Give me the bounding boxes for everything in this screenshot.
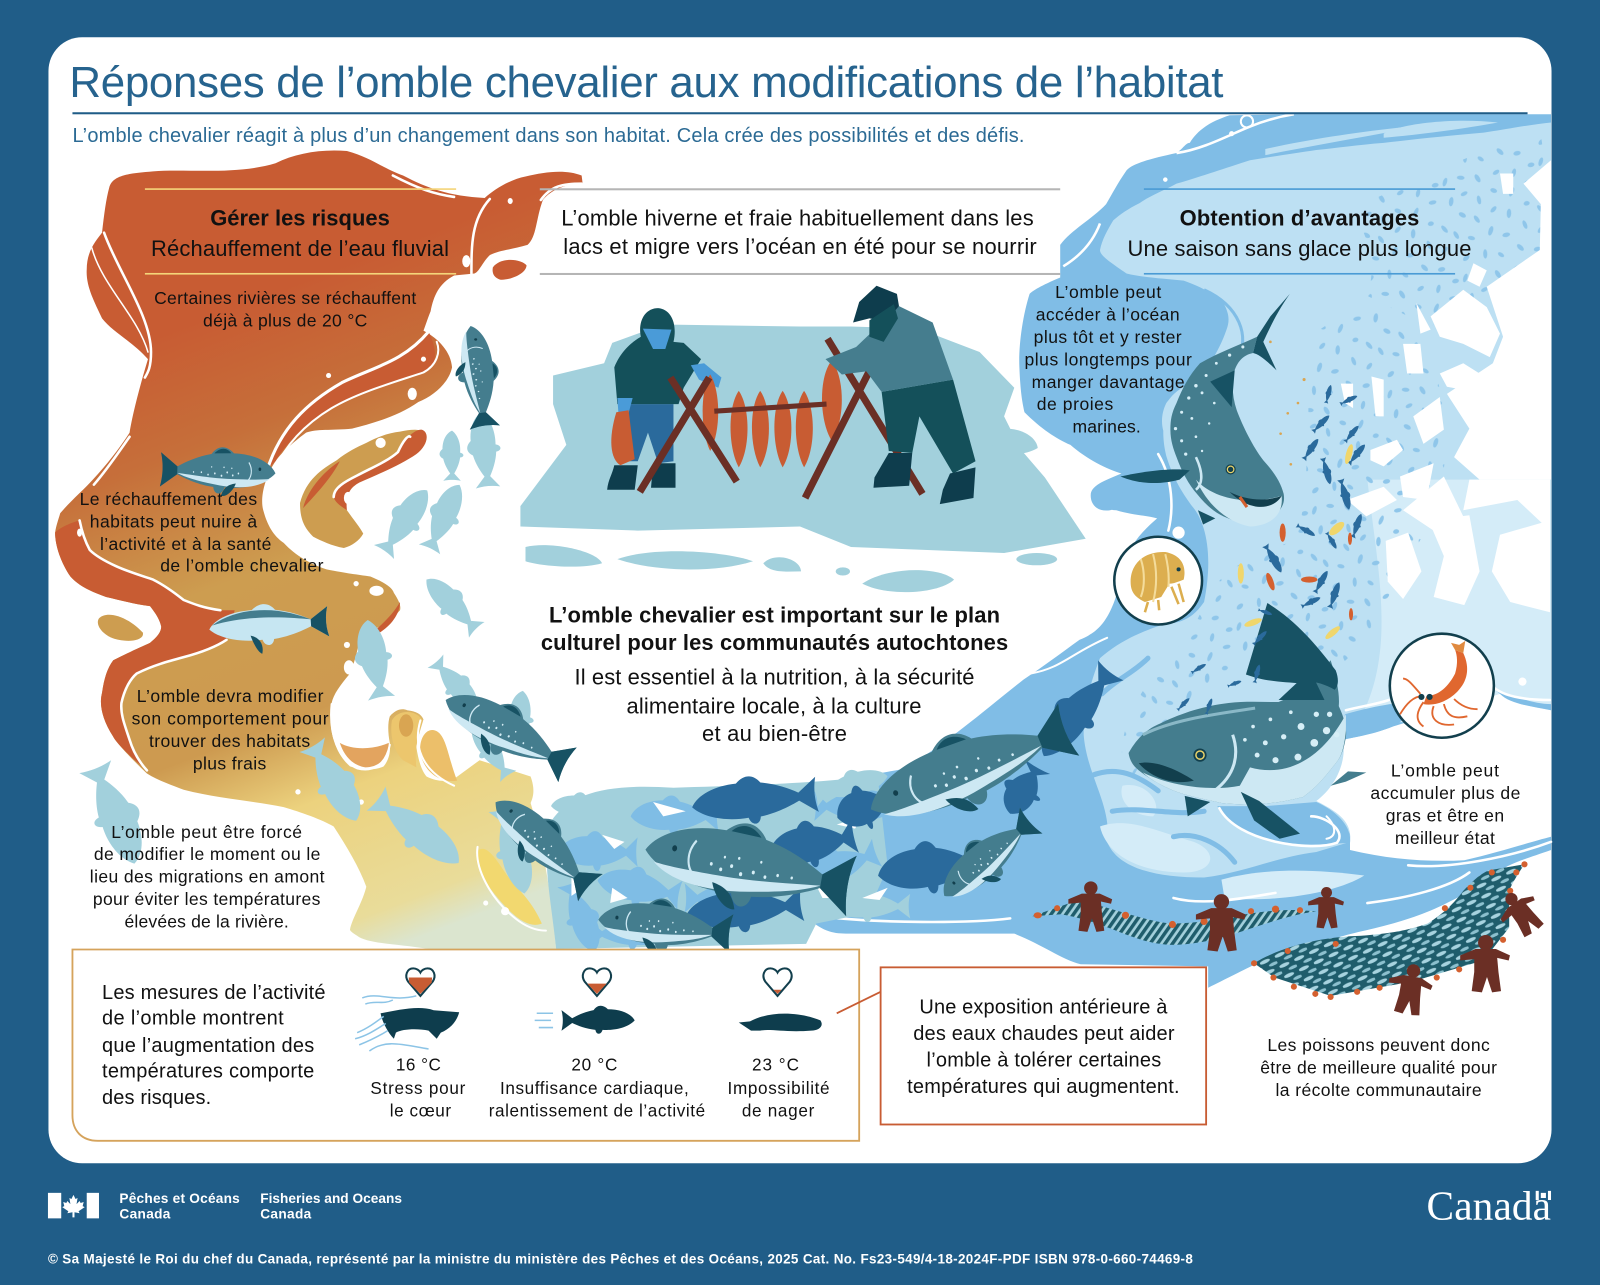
orange left band — [55, 520, 235, 770]
text: fat condition: accumuler plus de — [1370, 783, 1520, 803]
text: activity measures: de l’omble montrent — [102, 1007, 284, 1029]
callout: prior exposure: températures qui augmentent. — [907, 1076, 1180, 1098]
footer: government signature: Canada — [119, 1206, 171, 1221]
blue migrating fish — [683, 656, 1127, 938]
yellow bowl and lobes — [340, 743, 389, 767]
text: rivers warming — [154, 288, 416, 331]
footer: Canada wordmark: Canada — [1427, 1182, 1551, 1228]
ice floes — [1341, 160, 1551, 686]
white wave lines — [821, 115, 1551, 922]
text: migration timing: élevées de la rivière. — [124, 912, 289, 932]
text: habitat warming harm: de l’omble chevalier — [160, 555, 324, 575]
panel: managing risks heading: Réchauffement de l’eau fluvial — [151, 236, 449, 261]
river bubbles — [77, 198, 513, 915]
text: 23 degrees: Impossibilité — [728, 1078, 830, 1098]
text: ocean access: de proies — [1037, 394, 1113, 414]
panel: managing risks heading: Gérer les risques — [210, 206, 390, 231]
panel: activity measures box — [72, 949, 859, 1141]
fishing net in water — [1032, 881, 1344, 952]
text: migration timing: de modifier le moment ou le — [94, 844, 320, 864]
icon: tired fish — [535, 1006, 635, 1034]
mid blue bands beside fish — [1343, 704, 1429, 740]
small water island — [1091, 484, 1123, 511]
text: ocean access: plus tôt et y rester — [1034, 327, 1182, 347]
panel: managing risks heading — [145, 188, 456, 275]
mid blue fish cluster — [554, 785, 898, 957]
drying rack with fish — [640, 339, 922, 498]
text: rivers warming: Certaines rivières se réchauffent — [154, 288, 416, 308]
footer: government signature: Pêches et Océans — [119, 1191, 240, 1206]
orange island channel — [334, 430, 427, 510]
panel: gaining benefits heading: Obtention d’avantages — [1180, 206, 1419, 231]
panel: migration heading — [540, 188, 1060, 275]
callout: prior exposure: l’omble à tolérer certaines — [927, 1049, 1161, 1071]
text: cultural importance: et au bien-être — [702, 721, 847, 746]
pale blue right zone — [1357, 480, 1551, 724]
text: 20 degrees: ralentissement de l’activité — [489, 1100, 705, 1120]
text: activity measures: des risques. — [102, 1087, 211, 1109]
illustration: warming river — [55, 151, 583, 949]
text: migration timing — [90, 822, 325, 932]
orange oval near top — [493, 260, 527, 280]
text: activity measures — [102, 982, 326, 1109]
callout: prior exposure — [837, 967, 1206, 1124]
text: 16 degrees — [370, 1054, 466, 1120]
text: migration timing: pour éviter les températures — [93, 889, 321, 909]
medium blue water — [786, 114, 1551, 988]
text: fat condition: meilleur état — [1395, 828, 1495, 848]
lobes of water under fish — [1217, 802, 1350, 845]
footer: copyright line: © Sa Majesté le Roi du chef du Canada, représenté par la ministre du ministère des Pêches et des Océans, 2025 Cat. No. Fs23-549/4-18-2024F-PDF ISBN 978-0-660-74469-8 — [48, 1251, 1193, 1266]
upper pale sweep — [1384, 121, 1498, 138]
text: rivers warming: déjà à plus de 20 °C — [203, 311, 367, 331]
text: behaviour change: L’omble devra modifier — [137, 686, 324, 706]
text: activity measures: Les mesures de l’activité — [102, 982, 326, 1004]
mid blue swirl strokes — [1092, 658, 1235, 862]
text: activity measures: températures comporte — [102, 1061, 314, 1083]
text: cultural importance: culturel pour les communautés autochtones — [541, 630, 1008, 655]
text: cultural importance: Il est essentiel à la nutrition, à la sécurité — [574, 665, 974, 690]
icon: Canadian flag — [48, 1193, 99, 1218]
right fisher — [826, 286, 976, 504]
panel: migration heading: lacs et migre vers l’océan en été pour se nourrir — [563, 234, 1037, 259]
text: cultural importance: L’omble chevalier est important sur le plan — [549, 602, 1000, 627]
text: fat condition: gras et être en — [1386, 805, 1504, 825]
text: cultural importance: alimentaire locale, à la culture — [627, 693, 921, 718]
pale fish over cluster — [740, 761, 910, 922]
full fishing net on shore — [1251, 861, 1550, 1018]
illustration: ice with fishers — [520, 286, 1086, 592]
text: ocean access: L’omble peut — [1055, 282, 1161, 302]
text: behaviour change: trouver des habitats — [149, 731, 310, 751]
footer: government signature: Fisheries and Oceans — [260, 1191, 402, 1206]
fish cluster base — [547, 776, 888, 949]
icon: heart 20C — [583, 968, 611, 996]
text: behaviour change: plus frais — [193, 753, 267, 773]
text: habitat warming harm: Le réchauffement des — [80, 489, 257, 509]
text: fat condition: L’omble peut — [1391, 761, 1499, 781]
panel: gaining benefits heading: Une saison sans glace plus longue — [1128, 236, 1471, 261]
text: community harvest: la récolte communautaire — [1276, 1080, 1482, 1100]
arctic char group — [160, 323, 1084, 962]
panel: migration heading: L’omble hiverne et fraie habituellement dans les — [561, 206, 1034, 231]
text: ocean access — [1024, 282, 1192, 437]
pale swirl patches — [1100, 785, 1364, 899]
mid blue arc by text — [1204, 290, 1243, 359]
tan oval — [98, 615, 143, 641]
text: 23 degrees — [728, 1054, 830, 1120]
text: 20 degrees: 20 °C — [571, 1054, 617, 1074]
text: 20 degrees: Insuffisance cardiaque, — [500, 1078, 689, 1098]
text: habitat warming harm: habitats peut nuire à — [90, 512, 257, 532]
left fisher — [607, 308, 721, 490]
icon: amphipod — [1114, 537, 1202, 624]
text: migration timing: L’omble peut être forcé — [111, 822, 302, 842]
text: ocean access: plus longtemps pour — [1024, 349, 1192, 369]
gaps between cluster fish — [571, 802, 888, 903]
tan island channel — [300, 430, 427, 548]
title: Réponses de l’omble chevalier aux modifications de l’habitat — [69, 58, 1223, 107]
ice — [520, 324, 1086, 553]
large char feeding — [1120, 294, 1290, 527]
callout: prior exposure: Une exposition antérieure à — [919, 996, 1168, 1018]
text: migration timing: lieu des migrations en amont — [90, 867, 325, 887]
text: activity measures: que l’augmentation des — [102, 1035, 314, 1057]
text: 16 degrees: le cœur — [390, 1100, 451, 1120]
text: 23 degrees: de nager — [742, 1100, 815, 1120]
light blue water — [1084, 122, 1551, 878]
text: 16 degrees: Stress pour — [370, 1078, 466, 1098]
text: 16 degrees: 16 °C — [396, 1054, 441, 1074]
small prey fish and krill — [1176, 341, 1368, 715]
white shore line — [1177, 114, 1294, 153]
icon: heart 16C — [406, 968, 435, 996]
text: community harvest: être de meilleure qualité pour — [1260, 1057, 1497, 1077]
text: 23 degrees: 23 °C — [752, 1054, 799, 1074]
text: ocean access: manger davantage — [1032, 372, 1185, 392]
large char bottom — [1129, 603, 1366, 839]
icon: still fish — [739, 1014, 822, 1031]
text: ocean access: marines. — [1072, 417, 1141, 437]
title rule — [72, 112, 1528, 114]
illustration: ocean water — [786, 114, 1551, 988]
text: behaviour change — [132, 686, 329, 773]
text: habitat warming harm: l’activité et à la santé — [100, 534, 271, 554]
text: behaviour change: son comportement pour — [132, 708, 329, 728]
orange tip on river bend — [369, 602, 400, 635]
ice floes — [526, 429, 1057, 592]
text: community harvest — [1260, 1035, 1497, 1100]
lower right white shore — [1316, 694, 1551, 861]
icon: stressed fish — [355, 996, 459, 1051]
text: community harvest: Les poissons peuvent donc — [1267, 1035, 1490, 1055]
text: cultural importance — [541, 602, 1008, 746]
yellow pool behind fish — [476, 849, 542, 925]
orange side channel — [267, 332, 435, 469]
icon: shrimp — [1390, 634, 1494, 738]
text: 20 degrees — [489, 1054, 705, 1120]
icon: heart 23C — [763, 968, 792, 996]
footer: government signature: Canada — [260, 1206, 312, 1221]
white river lines — [80, 176, 582, 931]
pale migrating fish — [75, 411, 614, 898]
subtitle: L’omble chevalier réagit à plus d’un changement dans son habitat. Cela crée des possibilités et des défis. — [72, 125, 1024, 147]
callout: prior exposure: des eaux chaudes peut aider — [913, 1023, 1175, 1045]
footer: government signature — [48, 1191, 402, 1221]
school droplets — [1122, 312, 1446, 781]
panel: gaining benefits heading — [1128, 188, 1471, 275]
text: habitat warming harm — [80, 489, 324, 575]
text: fat condition — [1370, 761, 1520, 848]
text: ocean access: accéder à l’océan — [1036, 304, 1180, 324]
